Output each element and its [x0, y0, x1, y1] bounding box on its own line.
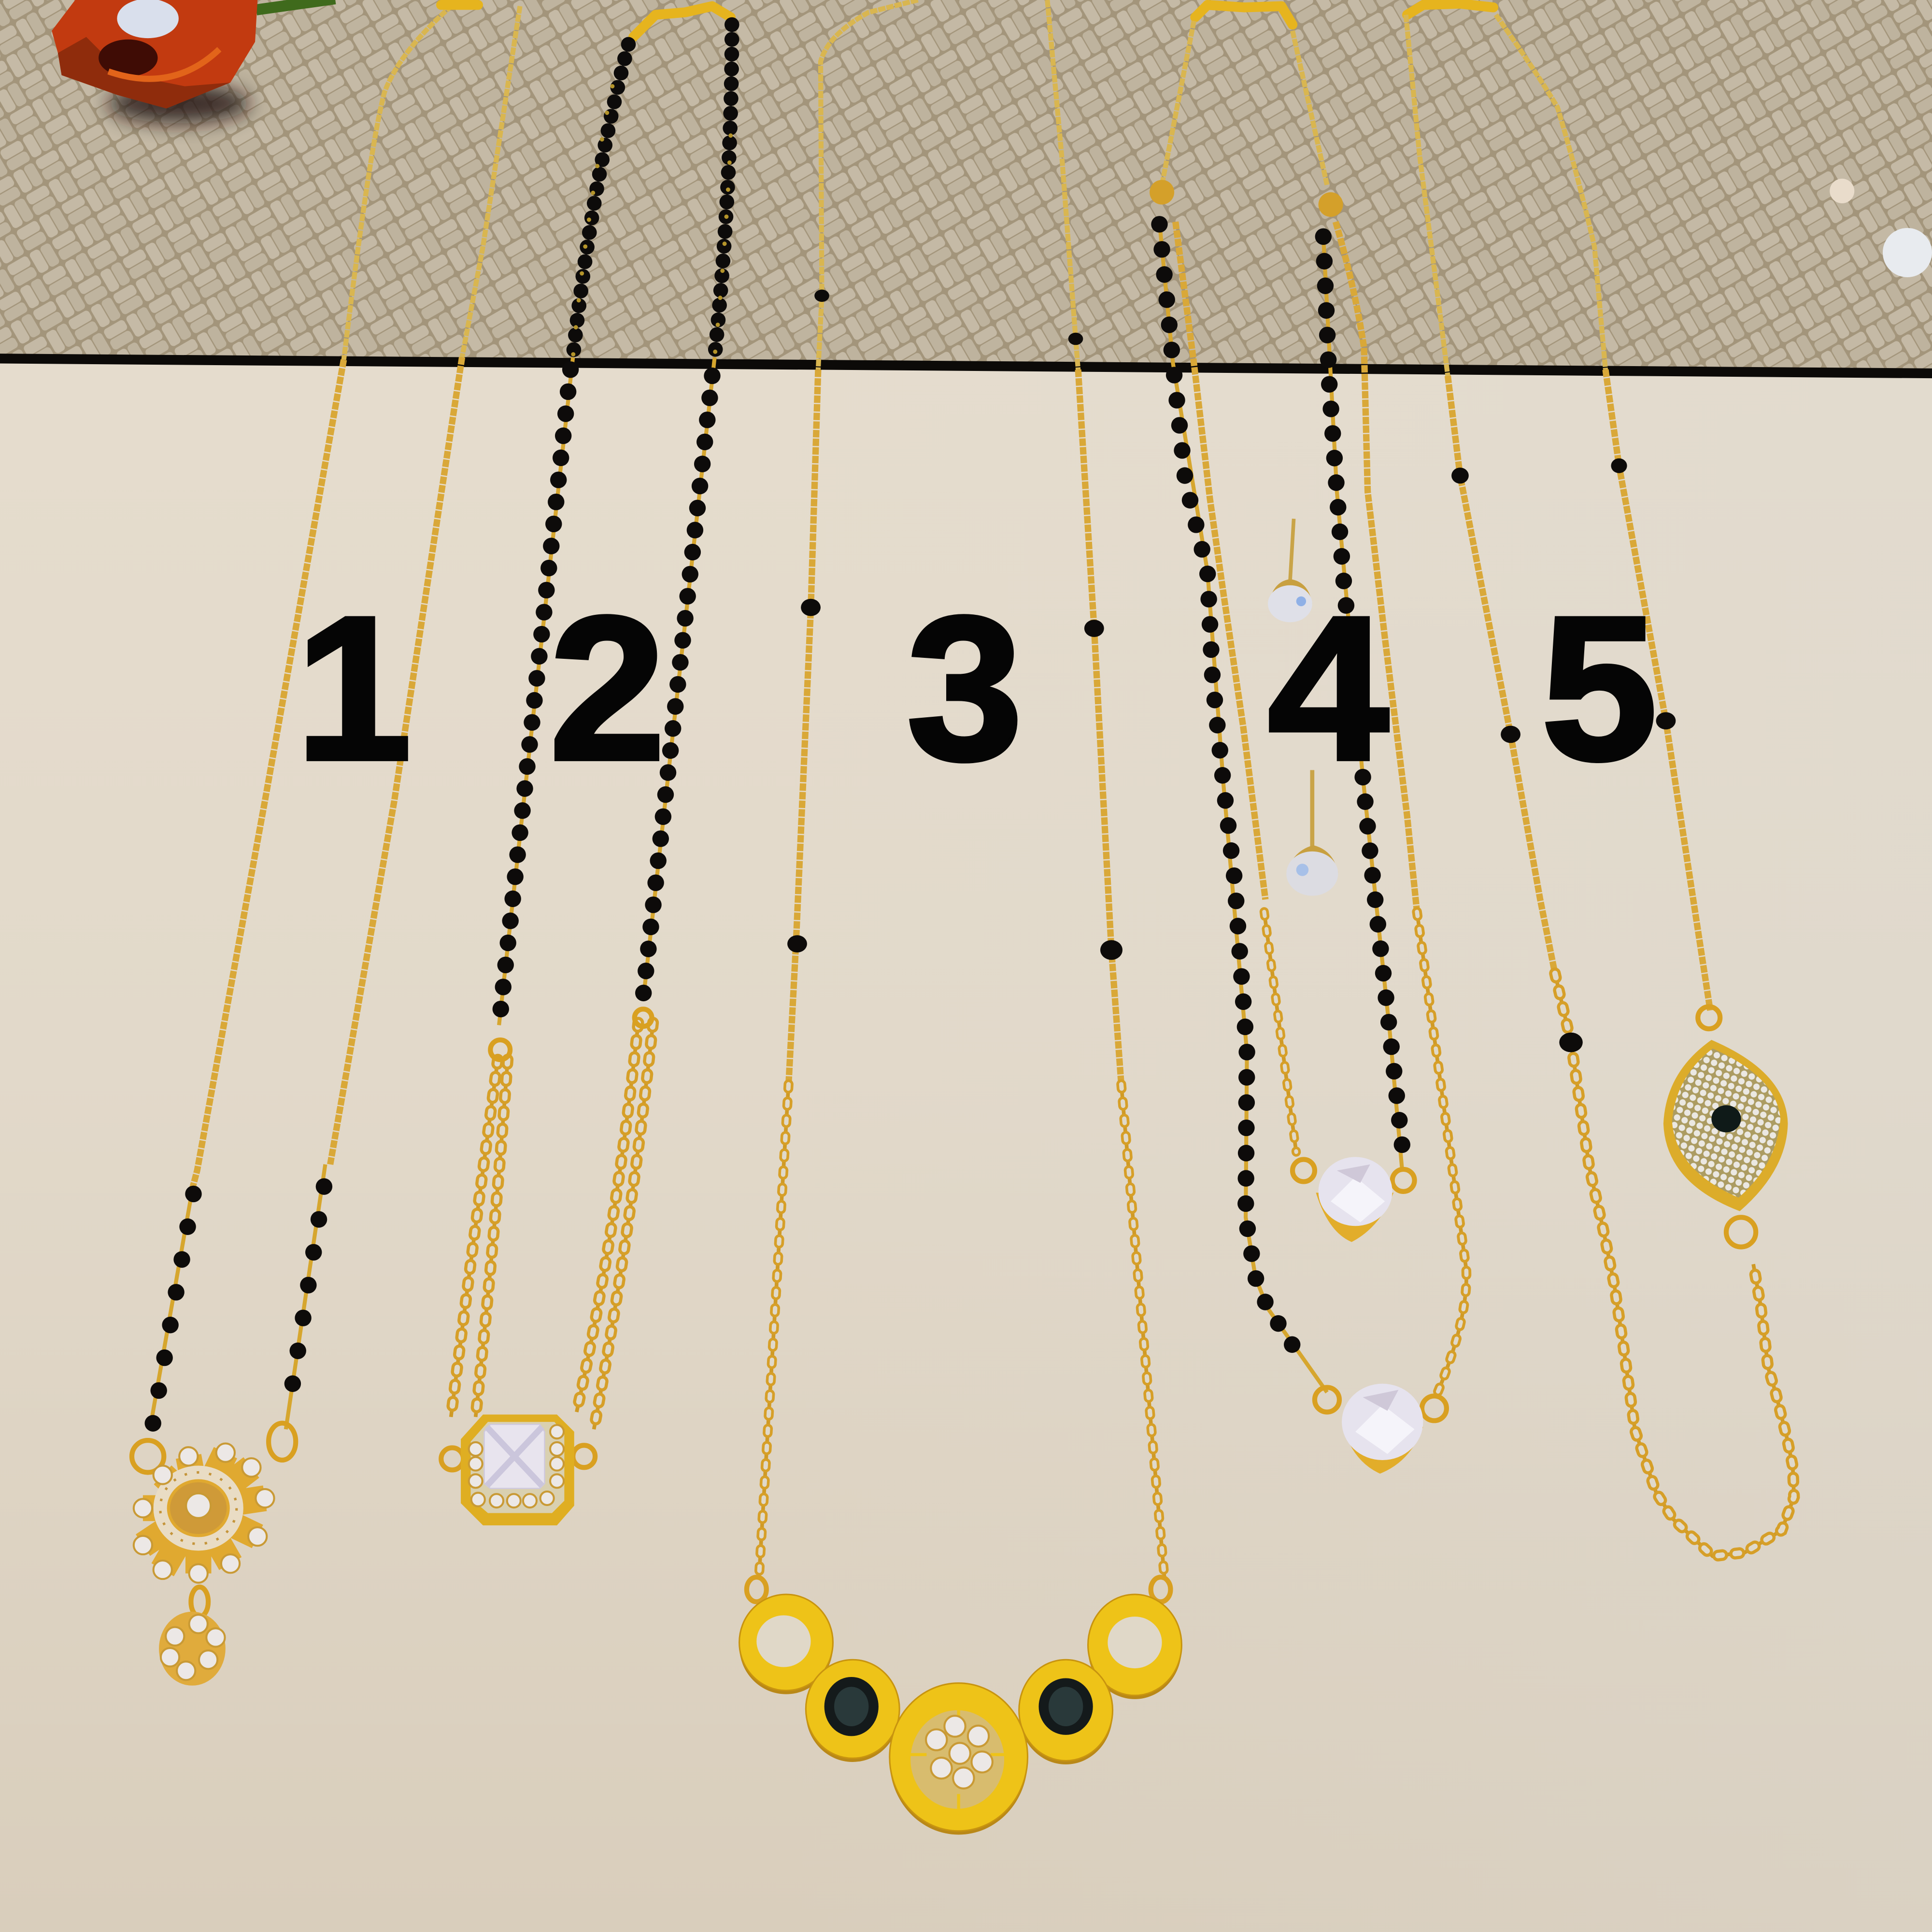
left chain upper — [344, 0, 458, 360]
necklace 2 — [441, 6, 732, 1525]
flower stem — [256, 0, 335, 10]
upper solitaire setting — [1316, 1193, 1393, 1242]
left jump ring — [132, 1440, 164, 1472]
decoration: two loose pearls — [1830, 179, 1932, 277]
left double chain outer — [451, 1060, 498, 1417]
pendant right ring — [573, 1445, 595, 1467]
left link wire — [150, 1190, 192, 1427]
right gold wire — [643, 357, 715, 1000]
left gold specks — [573, 86, 612, 357]
right double chain outer — [594, 1023, 653, 1429]
sun pendant centre stone — [186, 1493, 211, 1518]
right chain upper — [1496, 15, 1605, 369]
inner left chain — [1176, 222, 1265, 899]
stud earring upper — [1268, 519, 1312, 622]
inner left chain lower — [1264, 912, 1296, 1152]
pendant left ring — [441, 1448, 463, 1470]
stone facet — [487, 1427, 542, 1486]
small pearl — [1830, 179, 1854, 203]
upper solitaire stone — [1319, 1157, 1392, 1226]
centre stones — [926, 1716, 993, 1789]
right ring — [1151, 1577, 1170, 1602]
left double chain inner — [476, 1060, 508, 1417]
evil eye pave — [1672, 1049, 1780, 1198]
station beads — [1451, 458, 1676, 1052]
inner strand wire — [1323, 237, 1402, 1170]
bottom ring — [1726, 1217, 1756, 1247]
left end cap — [1150, 180, 1174, 204]
right chain upper — [462, 6, 520, 357]
left chain middle — [789, 369, 818, 1084]
right chain middle — [1078, 369, 1121, 1084]
large pearl — [1883, 228, 1932, 277]
square pendant main stone — [484, 1424, 545, 1489]
lower solitaire setting — [1343, 1427, 1423, 1474]
flower petals — [52, 0, 257, 108]
number 1: 1 — [296, 574, 412, 803]
station beads — [787, 289, 1122, 960]
top clasp — [1407, 4, 1493, 15]
evil eye pupil — [1711, 1105, 1741, 1132]
sun pendant outer stones — [134, 1444, 274, 1583]
left black beads — [153, 1194, 194, 1424]
open circle right — [1088, 1594, 1181, 1699]
left chain middle — [1448, 376, 1555, 973]
stud earring lower — [1286, 770, 1338, 896]
left chain lower — [192, 360, 344, 1189]
necklace 4 — [1150, 5, 1466, 1474]
flower highlight — [108, 49, 219, 79]
open circle left — [739, 1594, 833, 1694]
lower pendant connectors — [1315, 1387, 1447, 1421]
necklace 5 — [1406, 4, 1794, 1556]
right black beads — [288, 1187, 324, 1411]
sun pendant rays — [143, 1453, 265, 1574]
left chain lower loop — [1555, 973, 1794, 1556]
upper pendant connectors — [1293, 1160, 1415, 1192]
left bead strand upper — [573, 44, 628, 357]
right gold specks — [715, 136, 731, 357]
necklace 1 — [132, 0, 520, 1686]
right link wire — [286, 1165, 325, 1429]
centre cross bars — [910, 1710, 1006, 1809]
right chain lower — [330, 357, 462, 1165]
top right ring — [635, 1009, 652, 1026]
background: woven tan mat — [0, 0, 1932, 372]
centre circle — [890, 1683, 1028, 1834]
top ring — [1698, 1007, 1720, 1029]
left chain upper — [1406, 15, 1448, 376]
decoration: red flower with pearl — [52, 0, 335, 123]
left ring — [747, 1577, 767, 1602]
right chain lower — [1605, 369, 1710, 1010]
flower shadow — [107, 84, 250, 123]
left chain lower — [759, 1084, 789, 1577]
clasp — [441, 3, 478, 7]
top clasp — [633, 6, 731, 37]
flower lower shading — [58, 37, 230, 108]
right end cap — [1319, 192, 1343, 217]
sun pendant ring of stones — [160, 1472, 237, 1544]
right top chain — [1293, 31, 1327, 185]
lower solitaire stone — [1342, 1384, 1423, 1460]
onyx circle right — [1019, 1660, 1113, 1764]
number labels — [296, 574, 1657, 803]
right jump ring — [269, 1423, 296, 1460]
right double chain inner — [577, 1023, 638, 1412]
halo stones — [469, 1425, 564, 1507]
drop charm — [159, 1612, 226, 1686]
pearl — [117, 0, 179, 38]
outer strand wire — [1160, 222, 1327, 1392]
right chain lower — [1121, 1084, 1165, 1577]
square pendant halo — [470, 1422, 564, 1513]
number 4: 4 — [1268, 574, 1390, 803]
top clasp — [1195, 5, 1293, 25]
square pendant frame — [461, 1415, 574, 1525]
left gold wire — [499, 357, 573, 1025]
outer right chain lower — [1417, 912, 1466, 1395]
outer bead strand — [1160, 224, 1304, 1364]
top left ring — [490, 1040, 510, 1060]
number 2: 2 — [550, 574, 666, 803]
flower dark centre — [99, 40, 158, 76]
left bead strand lower — [499, 369, 570, 1025]
necklace 3 — [739, 0, 1181, 1834]
number 5: 5 — [1541, 574, 1657, 803]
outer right chain — [1335, 222, 1417, 912]
drop bail — [191, 1587, 208, 1617]
right chain upper — [1047, 0, 1078, 369]
evil eye frame — [1663, 1040, 1788, 1211]
black edge of the mat — [0, 354, 1932, 378]
right bead strand lower — [643, 376, 712, 995]
left top chain — [1162, 21, 1194, 185]
number 3: 3 — [907, 574, 1023, 803]
right bead strand upper — [715, 25, 732, 357]
left chain upper — [818, 0, 918, 369]
inner bead strand — [1323, 237, 1402, 1146]
onyx circle left — [806, 1660, 899, 1762]
